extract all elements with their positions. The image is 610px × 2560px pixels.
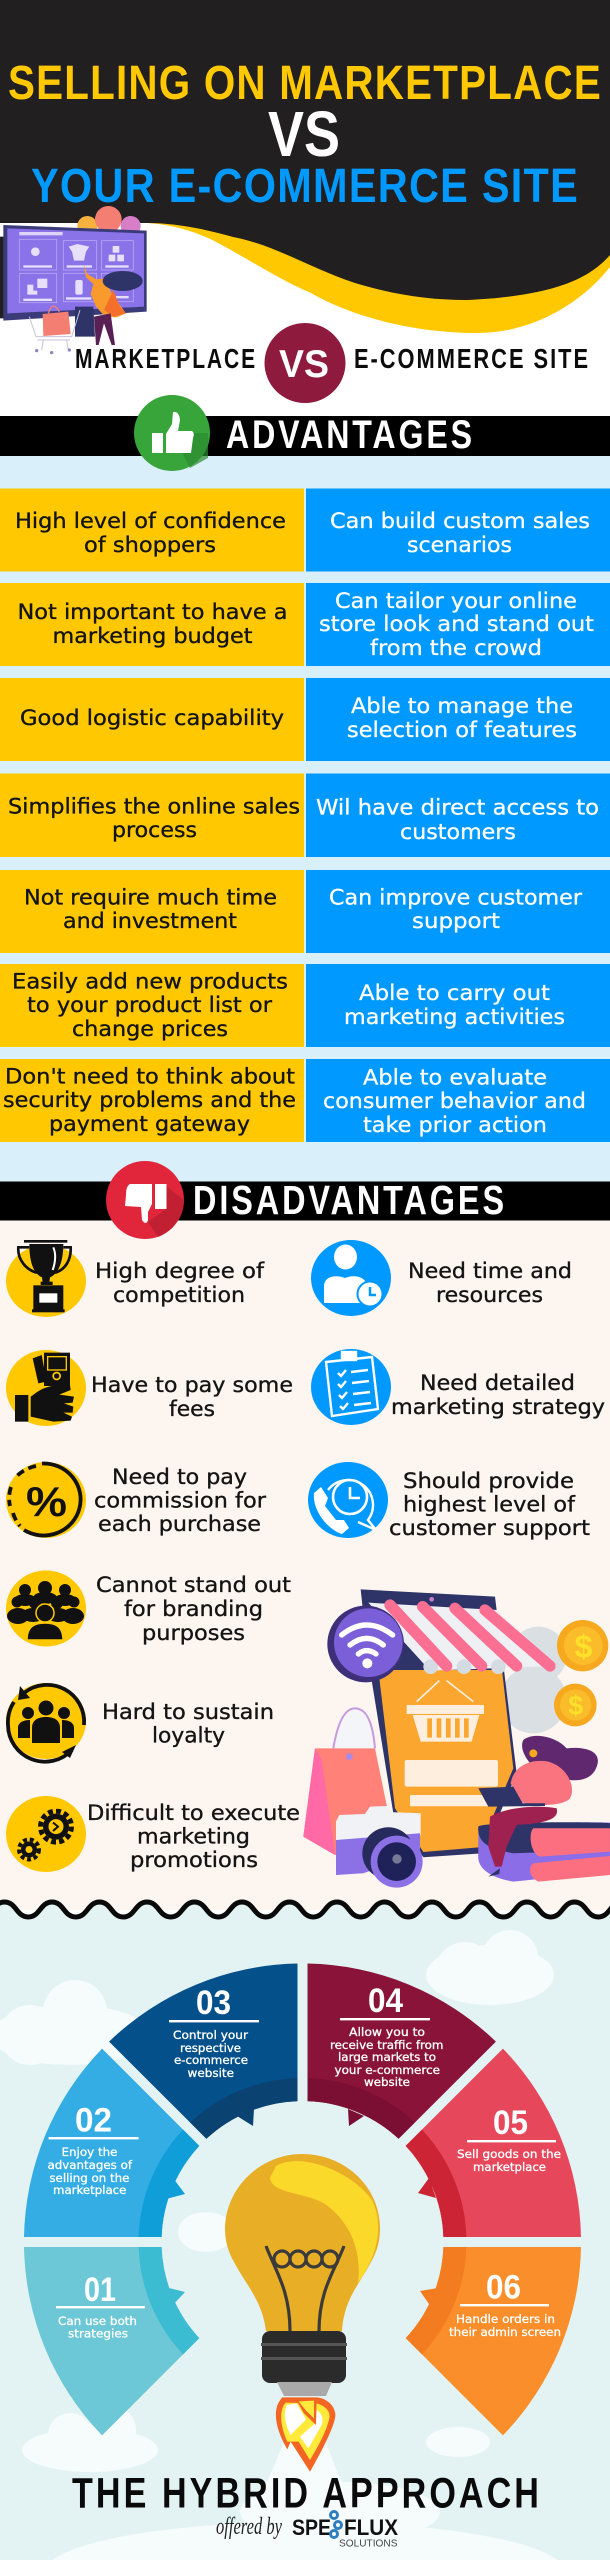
segment 04: Allow you to <box>349 2025 425 2039</box>
marketplace advantages column: and investment <box>63 909 237 933</box>
item: cannot stand out for branding: Cannot stand out <box>96 1573 291 1597</box>
icon: percent dial: % <box>26 1478 67 1525</box>
item: commission for each purchase: Need to pay <box>112 1465 247 1489</box>
illustration: mobile store with shopper: $ <box>575 1628 593 1664</box>
item: high degree of competition: High degree of <box>95 1259 265 1283</box>
yellow swoosh <box>148 200 610 333</box>
comparison labels <box>75 323 590 403</box>
marketplace advantages column: of shoppers <box>84 533 216 557</box>
dark header background <box>0 0 610 300</box>
segment 01: 01 <box>84 2271 116 2309</box>
footer logo: offered by <box>216 2514 282 2540</box>
illustration: mobile store with shopper: $ <box>568 1691 583 1721</box>
segment 04 <box>308 1964 496 2139</box>
marketplace advantages column: High level of confidence <box>15 509 286 533</box>
item: have to pay some fees: Have to pay some <box>91 1373 293 1397</box>
e-commerce site advantages column <box>306 488 610 1142</box>
marketplace advantages column: security problems and the <box>3 1088 296 1112</box>
item: high degree of competition <box>6 1240 265 1317</box>
item: cannot stand out for branding: purposes <box>142 1621 245 1645</box>
e-commerce site advantages column: Can tailor your online <box>335 589 577 613</box>
segment 02: advantages of <box>48 2158 133 2172</box>
e-commerce site advantages column: store look and stand out <box>319 612 594 636</box>
illustration: mobile store with shopper <box>303 1589 610 1888</box>
e-commerce site advantages column: Wil have direct access to <box>316 796 599 820</box>
item: have to pay some fees: fees <box>169 1397 215 1421</box>
advantages heading band <box>0 395 610 471</box>
item: difficult to execute promotions: promotions <box>130 1848 258 1872</box>
e-commerce site advantages column: take prior action <box>363 1113 547 1137</box>
segment 04: 04 <box>368 1982 403 2020</box>
e-commerce site advantages column: Able to carry out <box>359 981 550 1005</box>
disadvantages heading band: DISADVANTAGES <box>193 1177 507 1223</box>
disadvantages section <box>0 1161 610 1910</box>
header section <box>0 0 610 416</box>
icon: clipboard checklist <box>326 1352 378 1416</box>
icon: phone and clock bubble <box>314 1480 376 1534</box>
title <box>8 57 602 213</box>
item: need detailed marketing strategy <box>311 1349 605 1425</box>
comparison labels: MARKETPLACE <box>75 343 257 374</box>
segment 03: Control your <box>173 2028 248 2042</box>
title: VS <box>268 98 340 170</box>
segment 04: receive traffic from <box>330 2038 444 2052</box>
item: highest level of customer support <box>308 1462 590 1540</box>
icon: retained group <box>8 1685 84 1762</box>
marketplace advantages column: Not important to have a <box>18 600 288 624</box>
icon: gears <box>19 1811 72 1860</box>
wavy divider <box>0 1902 610 2560</box>
illustration: shopper at online store screen <box>0 206 147 354</box>
marketplace advantages column: Simplifies the online sales <box>8 794 300 818</box>
item: difficult to execute promotions: Difficult to execute <box>87 1801 300 1825</box>
segment 05: Sell goods on the <box>457 2147 561 2161</box>
item: highest level of customer support: Should provide <box>403 1469 574 1493</box>
segment 06: Handle orders in <box>456 2312 555 2326</box>
hybrid approach section <box>0 1902 610 2560</box>
icon: light bulb rocket <box>225 2154 380 2472</box>
marketplace advantages column: process <box>112 818 197 842</box>
marketplace advantages column: change prices <box>72 1017 228 1041</box>
segment 02: 02 <box>75 2102 112 2140</box>
item: commission for each purchase: each purchase <box>98 1512 261 1536</box>
segment 02 <box>24 2049 199 2237</box>
e-commerce site advantages column: scenarios <box>407 533 512 557</box>
e-commerce site advantages column: from the crowd <box>370 636 542 660</box>
segment 05 <box>406 2049 581 2237</box>
icon: person with clock <box>324 1244 382 1306</box>
segment 02: Enjoy the <box>62 2145 118 2159</box>
item: cannot stand out for branding: for branding <box>124 1597 263 1621</box>
item: cannot stand out for branding <box>6 1570 291 1646</box>
vs badge <box>264 323 346 403</box>
segment 04: large markets to <box>338 2050 436 2064</box>
icon: crowd <box>7 1581 84 1640</box>
item: high degree of competition: competition <box>113 1283 245 1307</box>
marketplace advantages column <box>0 488 304 1142</box>
segment 05: marketplace <box>473 2160 546 2174</box>
marketplace advantages column: payment gateway <box>49 1112 250 1136</box>
advantages section <box>0 395 610 1182</box>
segment 05: 05 <box>493 2104 528 2142</box>
segment 03: e-commerce <box>174 2053 248 2067</box>
segment 03: website <box>188 2066 234 2080</box>
segment 01: strategies <box>68 2326 128 2340</box>
item: need time and resources: Need time and <box>408 1259 572 1283</box>
item: have to pay some fees <box>6 1350 293 1426</box>
e-commerce site advantages column: Can build custom sales <box>330 509 590 533</box>
item: commission for each purchase: commission for <box>94 1488 266 1512</box>
footer logo: FLUX <box>344 2515 398 2540</box>
e-commerce site advantages column: selection of features <box>347 718 577 742</box>
item: need time and resources: resources <box>436 1283 543 1307</box>
segment 06 <box>406 2247 581 2435</box>
item: commission for each purchase <box>6 1462 266 1538</box>
segment 02: selling on the <box>49 2171 129 2185</box>
icon: percent dial <box>9 1463 81 1535</box>
item: difficult to execute promotions <box>6 1796 300 1872</box>
footer logo: SOLUTIONS <box>339 2538 398 2550</box>
item: hard to sustain loyalty <box>6 1683 274 1762</box>
e-commerce site advantages column: Able to manage the <box>351 694 573 718</box>
icon: thumbs up <box>134 395 210 471</box>
item: need detailed marketing strategy: Need detailed <box>420 1371 575 1395</box>
store awning <box>368 1603 557 1674</box>
e-commerce site advantages column: customers <box>400 820 516 844</box>
item: hard to sustain loyalty: Hard to sustain <box>102 1700 274 1724</box>
advantages heading band: ADVANTAGES <box>226 413 475 457</box>
icon: hand holding money <box>15 1353 74 1422</box>
vs badge: VS <box>279 343 329 386</box>
segment 03: 03 <box>196 1984 231 2022</box>
marketplace advantages column: Easily add new products <box>12 970 288 994</box>
marketplace advantages column: Don't need to think about <box>5 1064 295 1088</box>
footer logo <box>216 2512 398 2550</box>
item: highest level of customer support: highest level of <box>403 1493 576 1517</box>
e-commerce site advantages column: Can improve customer <box>329 886 582 910</box>
marketplace advantages column: to your product list or <box>27 993 272 1017</box>
marketplace advantages column: marketing budget <box>52 624 252 648</box>
segment 06: 06 <box>486 2268 521 2306</box>
item: need time and resources <box>311 1240 572 1316</box>
item: hard to sustain loyalty: loyalty <box>152 1724 225 1748</box>
footer logo: SPE <box>292 2515 331 2540</box>
segment 01 <box>24 2247 199 2435</box>
background clouds <box>0 1930 565 2560</box>
segment 03 <box>109 1964 297 2139</box>
marketplace advantages column: Not require much time <box>24 886 277 910</box>
segment 04: your e-commerce <box>334 2063 440 2077</box>
e-commerce site advantages column: support <box>412 909 500 933</box>
e-commerce site advantages column: Able to evaluate <box>363 1066 547 1090</box>
segment 04: website <box>364 2075 410 2089</box>
segment 03: respective <box>180 2041 241 2055</box>
marketplace advantages column: Good logistic capability <box>20 706 284 730</box>
icon: blue gears <box>330 2512 342 2538</box>
e-commerce site advantages column: consumer behavior and <box>323 1089 586 1113</box>
disadvantages heading band <box>0 1161 610 1239</box>
icon: thumbs down <box>106 1161 184 1239</box>
item: need detailed marketing strategy: marketing strategy <box>391 1395 605 1419</box>
segment 01: Can use both <box>58 2314 137 2328</box>
segment 02: marketplace <box>53 2183 126 2197</box>
segment 06: their admin screen <box>449 2325 561 2339</box>
e-commerce site advantages column: marketing activities <box>344 1005 565 1029</box>
item: highest level of customer support: customer support <box>389 1516 590 1540</box>
icon: trophy <box>18 1240 71 1312</box>
item: difficult to execute promotions: marketing <box>137 1824 250 1848</box>
